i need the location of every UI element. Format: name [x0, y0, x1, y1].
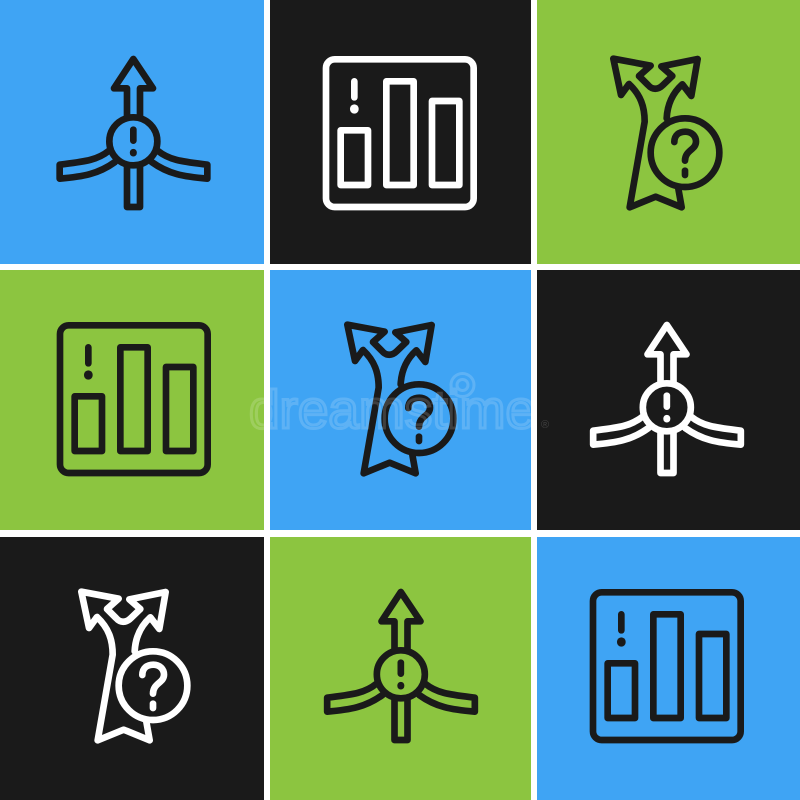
icon: forked arrow with question mark, black on green: [613, 59, 719, 207]
icon: forked arrow with question mark, black on blue: [347, 325, 453, 473]
panel: blue tile, centre: [270, 270, 531, 530]
panel: black tile, middle right: [537, 270, 800, 530]
watermark: [249, 374, 549, 440]
panel: black tile, bottom left: [0, 537, 264, 800]
watermark spiral logo: [451, 374, 474, 396]
icon: bar chart with exclamation, white on black: [326, 59, 474, 207]
panel: green tile, bottom centre: [270, 537, 531, 800]
watermark wordmark: dreamstime: [249, 380, 536, 440]
icon: bar chart with exclamation, black on blue: [593, 592, 741, 740]
panel: blue tile, bottom right: [537, 537, 800, 800]
panel: blue tile, top left: [0, 0, 264, 264]
icon: road junction with exclamation, black on blue: [60, 59, 207, 207]
panel: green tile, middle left: [0, 270, 264, 530]
icon: bar chart with exclamation, black on green: [60, 325, 208, 473]
icon: road junction with exclamation, white on black: [593, 325, 741, 473]
panel: green tile, top right: [537, 0, 800, 264]
watermark registered mark: ®: [541, 419, 549, 431]
icon: forked arrow with question mark, white on black: [81, 592, 187, 740]
panel: black tile, top centre: [270, 0, 531, 264]
icon: road junction with exclamation, black on green: [327, 592, 475, 740]
